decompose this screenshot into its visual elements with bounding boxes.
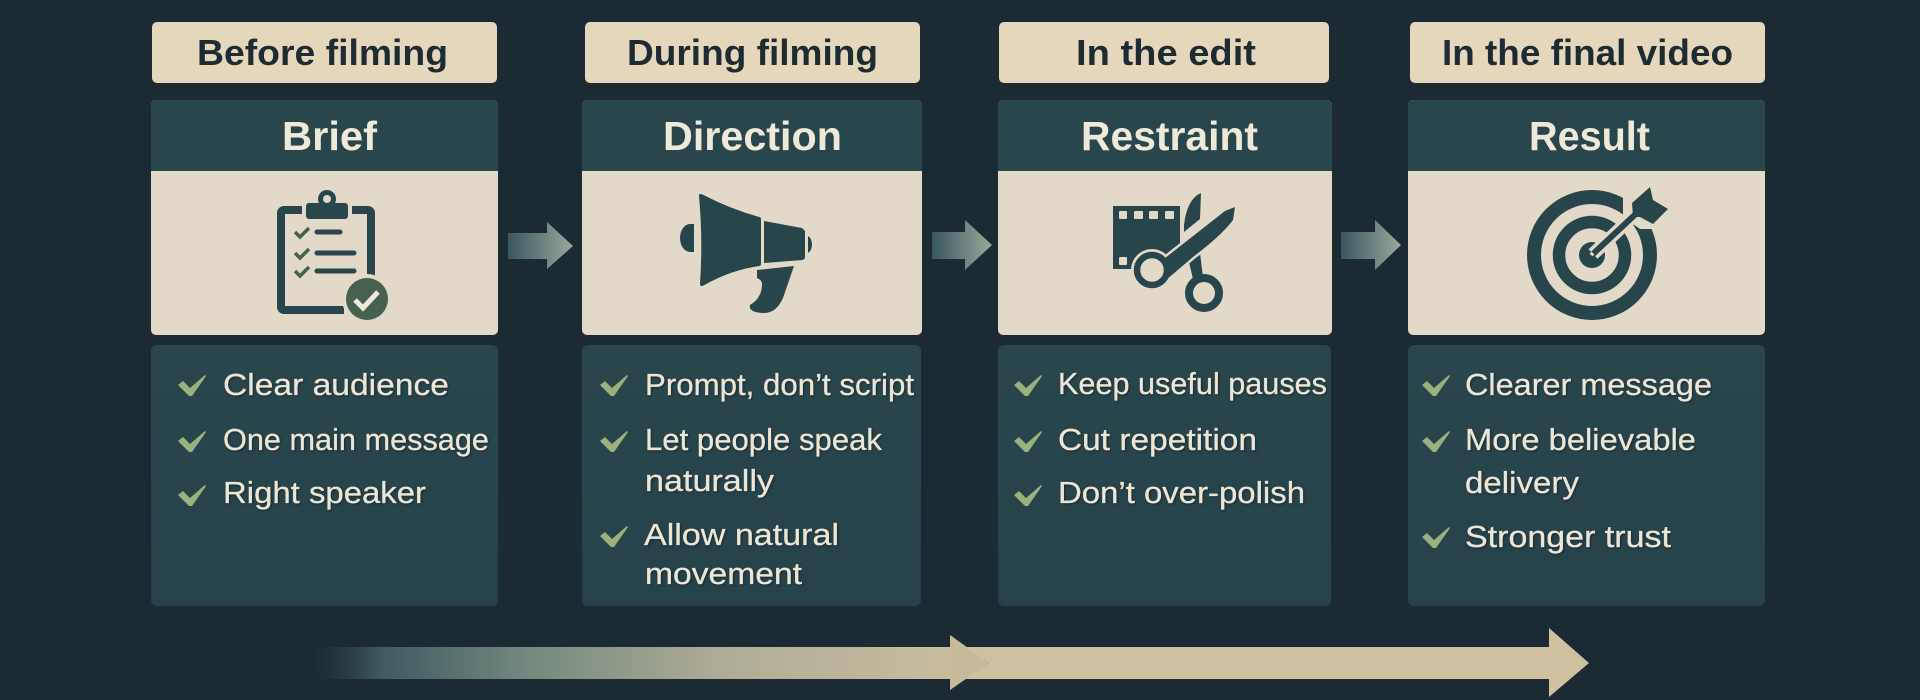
list: result items: Stronger trust (1465, 519, 1671, 554)
list: result items (1408, 345, 1765, 606)
list: direction items (582, 345, 921, 606)
tag: In the edit (999, 22, 1329, 83)
list: direction items: naturally (645, 463, 775, 498)
column: before filming (151, 22, 498, 606)
list: direction items: Prompt, don’t script (645, 367, 914, 402)
tag: During filming: During filming (627, 32, 878, 73)
list: brief items: Clear audience (223, 367, 449, 402)
list: result items: delivery (1465, 465, 1580, 500)
list: result items: More believable (1465, 422, 1696, 457)
card: Restraint: Restraint (1081, 113, 1258, 159)
tag: Before filming (152, 22, 497, 83)
list: restraint items: Don’t over-polish (1058, 475, 1305, 510)
list: direction items: Allow natural (644, 517, 839, 552)
progress arrow (313, 628, 1589, 697)
list: restraint items: Cut repetition (1058, 422, 1257, 457)
card: Result (1408, 100, 1765, 335)
arrow: brief to direction (508, 222, 573, 269)
tag: During filming (585, 22, 920, 83)
icon: megaphone (680, 196, 812, 313)
card: Restraint (998, 100, 1332, 335)
card: Direction: Direction (663, 113, 842, 159)
list: brief items: Right speaker (223, 475, 426, 510)
list: direction items: movement (645, 556, 802, 591)
list: restraint items: Keep useful pauses (1058, 366, 1327, 401)
tag: In the edit: In the edit (1076, 32, 1256, 73)
list: result items: Clearer message (1465, 367, 1712, 402)
list: restraint items (998, 345, 1331, 606)
icon: clipboard with check (281, 190, 392, 324)
card: Direction (582, 100, 922, 335)
arrow: direction to restraint (932, 220, 992, 270)
tag: In the final video (1410, 22, 1765, 83)
tag: Before filming: Before filming (197, 32, 448, 73)
list: brief items: One main message (223, 422, 489, 457)
list: direction items: Let people speak (645, 422, 882, 457)
card: Result: Result (1529, 113, 1650, 159)
column: in the edit (998, 22, 1332, 606)
icon: target with arrow (1534, 178, 1675, 313)
column: during filming (582, 22, 922, 606)
tag: In the final video: In the final video (1442, 32, 1733, 73)
icon: film strip and scissors (1113, 193, 1235, 308)
arrow: restraint to result (1341, 220, 1401, 270)
column: in the final video (1408, 22, 1765, 606)
list: brief items (151, 345, 498, 606)
card: Brief (151, 100, 498, 335)
card: Brief: Brief (282, 113, 377, 159)
